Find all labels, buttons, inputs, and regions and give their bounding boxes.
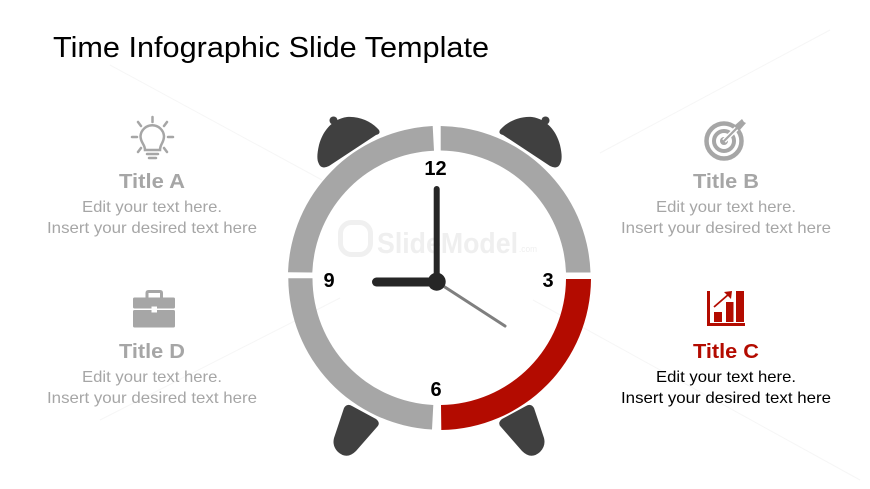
minute hand bbox=[434, 189, 440, 282]
text block: Edit your text here. bbox=[82, 369, 222, 386]
watermark: SlideModel bbox=[377, 228, 518, 260]
text block bbox=[47, 199, 257, 237]
right foot bbox=[499, 405, 544, 456]
ring segment: top right bbox=[441, 126, 590, 272]
number 6: 6 bbox=[430, 379, 442, 401]
text block: Insert your desired text here bbox=[621, 390, 831, 407]
text block: Insert your desired text here bbox=[47, 390, 257, 407]
text block bbox=[621, 369, 831, 407]
watermark: .com bbox=[519, 244, 537, 254]
alarm clock bbox=[288, 116, 591, 456]
text block: Edit your text here. bbox=[82, 199, 222, 216]
icon: light bulb bbox=[132, 117, 173, 158]
text block: Insert your desired text here bbox=[621, 220, 831, 237]
heading: Title C bbox=[693, 341, 759, 363]
number 3: 3 bbox=[542, 270, 554, 292]
icon: target bbox=[706, 119, 746, 158]
heading: Title B bbox=[693, 171, 759, 193]
ring segment: bottom left bbox=[288, 278, 433, 430]
ring segment: top left bbox=[288, 126, 434, 272]
hub bbox=[428, 273, 446, 291]
number 9: 9 bbox=[323, 270, 335, 292]
icon: briefcase bbox=[133, 292, 175, 328]
watermark bbox=[340, 222, 537, 260]
left foot bbox=[334, 405, 379, 456]
panel: Title B bbox=[621, 119, 831, 237]
panel: Title D bbox=[47, 292, 257, 407]
panel: Title A bbox=[47, 117, 257, 237]
text block bbox=[621, 199, 831, 237]
icon: rising bar chart bbox=[707, 291, 745, 326]
heading: Title A bbox=[119, 171, 185, 193]
second hand bbox=[437, 282, 505, 326]
text block: Edit your text here. bbox=[656, 369, 796, 386]
hour hand bbox=[376, 278, 437, 286]
text block: Insert your desired text here bbox=[47, 220, 257, 237]
ring segment: bottom right highlighted bbox=[441, 279, 591, 430]
title: Time Infographic Slide Template bbox=[53, 32, 489, 64]
right bell bbox=[499, 116, 562, 167]
text block bbox=[47, 369, 257, 407]
panel: Title C bbox=[621, 291, 831, 407]
text block: Edit your text here. bbox=[656, 199, 796, 216]
left bell bbox=[317, 116, 380, 167]
heading: Title D bbox=[119, 341, 185, 363]
number 12: 12 bbox=[424, 158, 447, 180]
